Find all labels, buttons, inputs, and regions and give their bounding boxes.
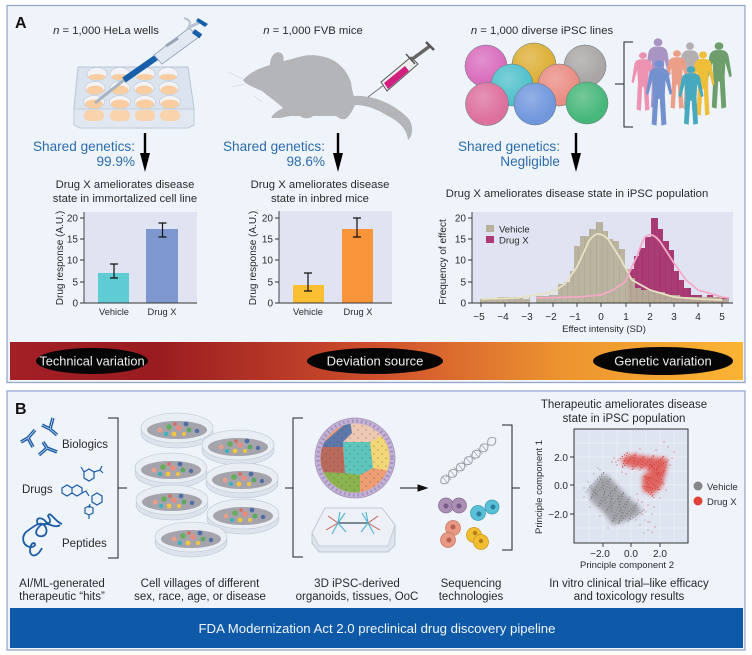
text: hits caption: AI/ML-generated: [19, 578, 105, 590]
text: sequencing caption: technologies: [439, 591, 504, 603]
bar chart: cell line: Drug X: [148, 307, 176, 317]
bar chart: cell line: 15: [67, 234, 78, 246]
histogram chart: −3: [521, 312, 533, 323]
legend: Vehicle: [707, 482, 738, 493]
scatter plot: 2.0: [554, 453, 568, 464]
heading: FVB mice: n = 1,000 FVB mice: [263, 25, 363, 37]
text: immortalized conclusion: Drug X ameliorates disease: [56, 179, 194, 191]
histogram chart: 1: [623, 312, 629, 323]
panel B: [7, 391, 745, 650]
text: cell villages caption: Cell villages of different: [141, 578, 260, 590]
bar chart: inbred mice: 20: [262, 214, 273, 224]
icon: petri dishes: [135, 413, 279, 557]
heading: HeLa wells: n = 1,000 HeLa wells: [53, 25, 159, 37]
arrow: [571, 133, 581, 172]
bar chart: inbred mice: 10: [262, 256, 273, 266]
vehicle cluster: [584, 468, 652, 533]
scatter plot: 0.0: [554, 481, 568, 492]
arrow: [333, 133, 343, 172]
label: shared genetics 99.9%: [33, 139, 135, 169]
bracket: [108, 418, 127, 558]
icon: peptide chain: [23, 514, 62, 555]
scatter plot: Principle component 2: [580, 560, 674, 571]
drug X cluster: [612, 442, 674, 532]
label: shared genetics 98.6%: 98.6%: [286, 154, 325, 169]
legend: [694, 482, 738, 508]
text: iPSC conclusion: Drug X ameliorates disease state in iPSC population: [446, 188, 708, 200]
icon: well plate with pipette: [74, 18, 208, 128]
icon: diverse people: [631, 38, 732, 126]
scatter plot: [534, 429, 738, 571]
scatter plot: 2.0: [653, 549, 667, 560]
deviation gradient bar: Genetic variation: [614, 354, 712, 368]
histogram chart: Frequency of effect: [438, 219, 449, 305]
icon: sequenced cells: [438, 498, 499, 550]
icon: drug molecules: [62, 466, 103, 519]
panel label A: A: [15, 15, 27, 32]
histogram chart: 10: [455, 256, 466, 266]
bracket: [615, 42, 633, 127]
histogram chart: [438, 212, 733, 335]
title: therapeutic result: state in iPSC population: [563, 413, 685, 425]
text: immortalized conclusion: state in immortalized cell line: [53, 193, 197, 205]
histogram chart: Effect intensity (SD): [562, 324, 646, 335]
text: results caption: and toxicology results: [574, 591, 685, 603]
icon: organ on chip: [312, 508, 395, 552]
text: hits caption: therapeutic “hits”: [19, 591, 105, 603]
label: shared genetics negligible: Shared genetics:: [458, 139, 560, 154]
pipeline banner: FDA Modernization Act 2.0 preclinical drug discovery pipeline: [199, 621, 555, 636]
bracket: [285, 418, 303, 557]
icon: mouse: [228, 52, 412, 140]
text: inbred conclusion: Drug X ameliorates disease: [251, 179, 389, 191]
histogram chart: −5: [473, 312, 485, 323]
text: peptides: Peptides: [62, 538, 107, 550]
scatter plot: −2.0: [590, 549, 610, 560]
histogram chart: 5: [460, 278, 466, 288]
label: shared genetics 99.9%: Shared genetics:: [33, 139, 135, 154]
drug curve: [536, 235, 729, 298]
deviation gradient bar: Technical variation: [39, 354, 145, 368]
text: biologics: Biologics: [62, 439, 108, 451]
legend: Drug X: [499, 236, 529, 246]
bar chart: inbred mice: Vehicle: [293, 307, 323, 317]
text: organoids caption: 3D iPSC-derived: [314, 578, 400, 590]
bracket: [502, 425, 520, 550]
histogram chart: −1: [569, 312, 581, 323]
text: sequencing caption: Sequencing: [441, 578, 501, 590]
heading: iPSC lines: n = 1,000 diverse iPSC lines: [471, 25, 613, 37]
histogram chart: −2: [545, 312, 557, 323]
histogram chart: 0: [598, 312, 604, 323]
scatter plot: 0.0: [624, 549, 638, 560]
panel label B: B: [15, 401, 27, 418]
bar chart: inbred mice: 0: [267, 298, 273, 310]
title: therapeutic result: Therapeutic ameliorates disease: [541, 399, 707, 411]
arrow: [400, 485, 427, 491]
icon: iPSC spheres: [465, 43, 608, 126]
histogram chart: 20: [455, 214, 466, 224]
histogram chart: 4: [695, 312, 701, 323]
drug X bars: [628, 218, 729, 303]
arrow: [140, 133, 150, 172]
panel A: [7, 6, 745, 382]
bar chart: inbred mice: [248, 211, 392, 317]
bar chart: inbred mice: 5: [267, 278, 273, 288]
histogram chart: −4: [497, 312, 509, 323]
bar chart: inbred mice: Drug response (A.U.): [248, 211, 259, 305]
histogram chart: 3: [671, 312, 677, 323]
bar chart: cell line: Drug response (A.U.): [55, 211, 66, 305]
histogram chart: 0: [460, 298, 466, 310]
histogram chart: 15: [455, 234, 466, 246]
label: shared genetics 98.6%: [223, 139, 325, 169]
legend: Vehicle: [499, 224, 530, 236]
legend: [486, 224, 530, 246]
bar chart: cell line: Vehicle: [99, 307, 129, 317]
text: organoids caption: organoids, tissues, OoC: [296, 591, 418, 603]
text: results caption: In vitro clinical trial–like efficacy: [549, 578, 709, 590]
label: shared genetics 99.9%: 99.9%: [96, 154, 135, 169]
label: shared genetics negligible: [458, 139, 560, 169]
deviation gradient bar: Deviation source: [327, 354, 423, 368]
icon: DNA: [441, 437, 496, 484]
legend: Drug X: [707, 497, 737, 508]
scatter plot: Principle component 1: [534, 440, 545, 534]
bar chart: inbred mice: 15: [262, 234, 273, 246]
label: shared genetics 98.6%: Shared genetics:: [223, 139, 325, 154]
bar chart: cell line: 5: [72, 278, 78, 288]
text: inbred conclusion: state in inbred mice: [271, 193, 369, 205]
histogram chart: 5: [719, 312, 725, 323]
histogram chart: 2: [647, 312, 653, 323]
icon: organoid: [312, 418, 398, 500]
vehicle bars: [480, 222, 729, 303]
label: shared genetics negligible: Negligible: [500, 154, 560, 169]
deviation gradient bar: [10, 342, 743, 380]
bar chart: cell line: 10: [67, 256, 78, 266]
pipeline banner: [10, 608, 743, 648]
bar chart: cell line: 0: [72, 298, 78, 310]
bar chart: cell line: 20: [67, 214, 78, 224]
scatter plot: −2.0: [548, 510, 568, 521]
vehicle curve: [481, 234, 722, 300]
bar chart: inbred mice: Drug X: [344, 307, 372, 317]
text: drugs: Drugs: [22, 484, 53, 496]
icon: biologics antibodies: [21, 418, 57, 455]
icon: syringe: [368, 42, 434, 97]
bar chart: cell line: [55, 211, 197, 317]
text: cell villages caption: sex, race, age, or disease: [134, 591, 266, 603]
